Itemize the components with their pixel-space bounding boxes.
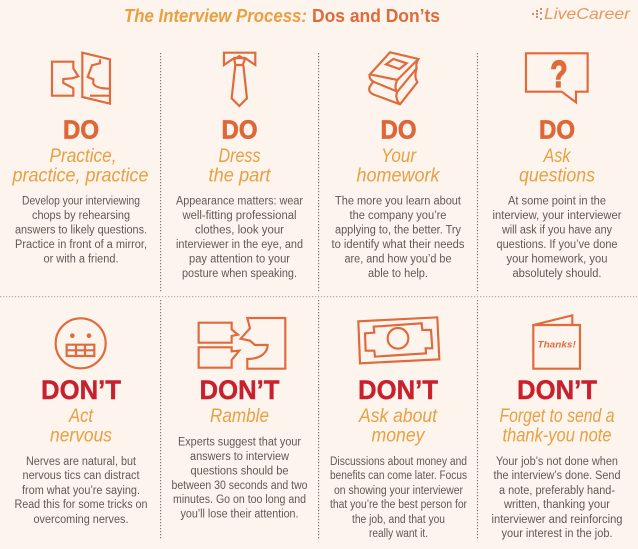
text: nervous body bbox=[14, 456, 148, 526]
panel: nervous bbox=[14, 318, 148, 526]
text: questions body: your homework, you bbox=[506, 254, 608, 266]
subheading: Ask questions: questions bbox=[519, 164, 595, 186]
text: homework body: are, and how you’d be bbox=[344, 254, 452, 266]
text: dress body: clothes, look your bbox=[195, 224, 284, 236]
text: questions body: interview, your interviewer bbox=[492, 210, 622, 222]
text: practice body: answers to likely questions. bbox=[15, 224, 147, 236]
text: nervous body: nervous tics can distract bbox=[22, 470, 140, 482]
text: money body bbox=[330, 456, 467, 540]
subheading: Your homework: homework bbox=[356, 164, 441, 186]
text: practice body: Develop your interviewing bbox=[22, 196, 140, 208]
text: questions body: will ask if you have any bbox=[501, 224, 612, 236]
text: thank-you body: the interview’s done. Send bbox=[494, 470, 620, 482]
text: money body: Discussions about money and bbox=[330, 456, 467, 468]
heading: DO: DO bbox=[380, 114, 416, 144]
panel: practice bbox=[12, 53, 149, 265]
text: homework body: to identify what their needs bbox=[332, 239, 465, 251]
text: questions body: At some point in the bbox=[508, 196, 606, 208]
text: practice body: Practice in front of a mirror, bbox=[15, 239, 147, 251]
panel: thank-you note bbox=[492, 315, 622, 540]
heading: DON'T: DON’T bbox=[200, 375, 280, 405]
text: ramble body bbox=[172, 436, 308, 520]
subheading: Forget to send a thank-you note bbox=[500, 405, 615, 446]
text: homework body: the company you’re bbox=[350, 210, 446, 222]
text: thank-you body: interviewer and reinforcing bbox=[492, 514, 622, 526]
heading: DO: DO bbox=[222, 114, 258, 144]
text: thank-you body: a note, preferably hand- bbox=[499, 485, 615, 497]
heading: DON'T: DON’T bbox=[358, 375, 438, 405]
title bbox=[124, 5, 440, 26]
text: nervous body: Nerves are natural, but bbox=[26, 456, 137, 468]
text: money body: that you’re the best person for bbox=[330, 499, 467, 511]
text: questions body: absolutely should. bbox=[512, 268, 602, 280]
panel: ramble bbox=[172, 318, 308, 520]
text: thank-you body: Your job’s not done when bbox=[496, 456, 618, 468]
heading: DO: DO bbox=[63, 114, 99, 144]
subheading: Ask about money: money bbox=[372, 424, 426, 446]
text: homework body: able to help. bbox=[368, 268, 428, 280]
panel: dress bbox=[176, 53, 303, 280]
text: ramble body: between 30 seconds and two bbox=[172, 480, 308, 492]
text: ramble body: questions should be bbox=[190, 466, 288, 478]
text: dress body: Appearance matters: wear bbox=[176, 196, 303, 208]
subheading: Ask questions bbox=[519, 145, 595, 186]
subheading: Act nervous bbox=[50, 405, 112, 446]
text: ramble body: answers to interview bbox=[190, 451, 290, 463]
text: dress body bbox=[176, 196, 303, 280]
logo: LiveCareer: LiveCareer bbox=[544, 6, 631, 23]
text: questions body bbox=[492, 196, 622, 280]
heading: DO: DO bbox=[539, 114, 575, 144]
text: practice body: chops by rehearsing bbox=[32, 210, 130, 222]
text: money body: the job, and that you bbox=[352, 514, 445, 526]
subheading: Dress the part: the part bbox=[208, 164, 272, 186]
text: homework body: The more you learn about bbox=[335, 196, 462, 208]
text: thank-you body bbox=[492, 456, 622, 540]
heading: DON'T: DON’T bbox=[41, 375, 121, 405]
text: money body: on showing your interviewer bbox=[334, 485, 463, 497]
icon: mirror faces bbox=[52, 53, 110, 104]
text: nervous body: overcoming nerves. bbox=[34, 514, 128, 526]
subheading: Ask about money: Ask about bbox=[358, 405, 438, 427]
subheading: Dress the part: Dress bbox=[218, 145, 261, 167]
text: nervous body: Read this for some tricks on bbox=[14, 499, 148, 511]
text: ramble body: minutes. Go on too long and bbox=[173, 494, 306, 506]
text: ramble body: Experts suggest that your bbox=[178, 436, 301, 448]
text: homework body: applying to, the better. Try bbox=[335, 224, 461, 236]
text: practice body: or with a friend. bbox=[44, 254, 118, 266]
panel: homework bbox=[332, 52, 465, 280]
subheading: Practice, practice, practice: Practice, bbox=[50, 145, 116, 167]
subheading: Your homework bbox=[356, 145, 441, 186]
icon: thank-you card: Thanks! bbox=[537, 340, 576, 350]
text: dress body: interviewer in the eye, and bbox=[176, 239, 303, 251]
icon: speech bubble with question mark: ? bbox=[550, 54, 568, 96]
text: questions body: questions. If you’ve done bbox=[496, 239, 618, 251]
subheading: Your homework: Your bbox=[381, 145, 417, 167]
text: dress body: posture when speaking. bbox=[182, 268, 297, 280]
panel: money bbox=[330, 317, 467, 540]
text: practice body bbox=[15, 196, 147, 266]
heading: DON'T: DON’T bbox=[517, 375, 597, 405]
text: money body: really want it. bbox=[369, 528, 428, 540]
icon: speech bubble with question mark bbox=[526, 53, 588, 102]
subheading: Dress the part bbox=[208, 145, 272, 186]
panel: questions bbox=[492, 53, 622, 280]
title: The Interview Process: bbox=[124, 5, 307, 26]
subheading: Ramble: Ramble bbox=[210, 405, 269, 427]
icon: nervous face bbox=[56, 318, 106, 368]
icon: thank-you card bbox=[533, 315, 580, 369]
text: dress body: well-fitting professional bbox=[182, 210, 296, 222]
subheading: Ask questions: Ask bbox=[543, 145, 572, 167]
subheading: Forget to send a thank-you note: thank-you note bbox=[502, 424, 612, 446]
subheading: Ask about money bbox=[358, 405, 438, 446]
text: ramble body: you’ll lose their attention. bbox=[180, 508, 298, 520]
title: Dos and Don’ts bbox=[312, 5, 440, 26]
text: thank-you body: written, thanking your bbox=[503, 499, 610, 511]
text: homework body bbox=[332, 196, 465, 280]
icon: books bbox=[369, 52, 418, 104]
icon: necktie bbox=[224, 53, 255, 106]
icon: banknote bbox=[358, 317, 439, 363]
text: dress body: pay attention to your bbox=[189, 254, 290, 266]
subheading: Forget to send a thank-you note: Forget to send a bbox=[500, 405, 615, 427]
subheading: Act nervous: nervous bbox=[50, 424, 112, 446]
subheading: Practice, practice, practice bbox=[12, 145, 149, 186]
icon: interrupted speech bbox=[199, 318, 285, 369]
text: money body: benefits can come later. Focus bbox=[330, 470, 467, 482]
text: thank-you body: your interest in the job. bbox=[502, 528, 612, 540]
text: nervous body: from what you’re saying. bbox=[22, 485, 140, 497]
subheading: Practice, practice, practice: practice, practice bbox=[12, 164, 149, 186]
subheading: Act nervous: Act bbox=[68, 405, 94, 427]
